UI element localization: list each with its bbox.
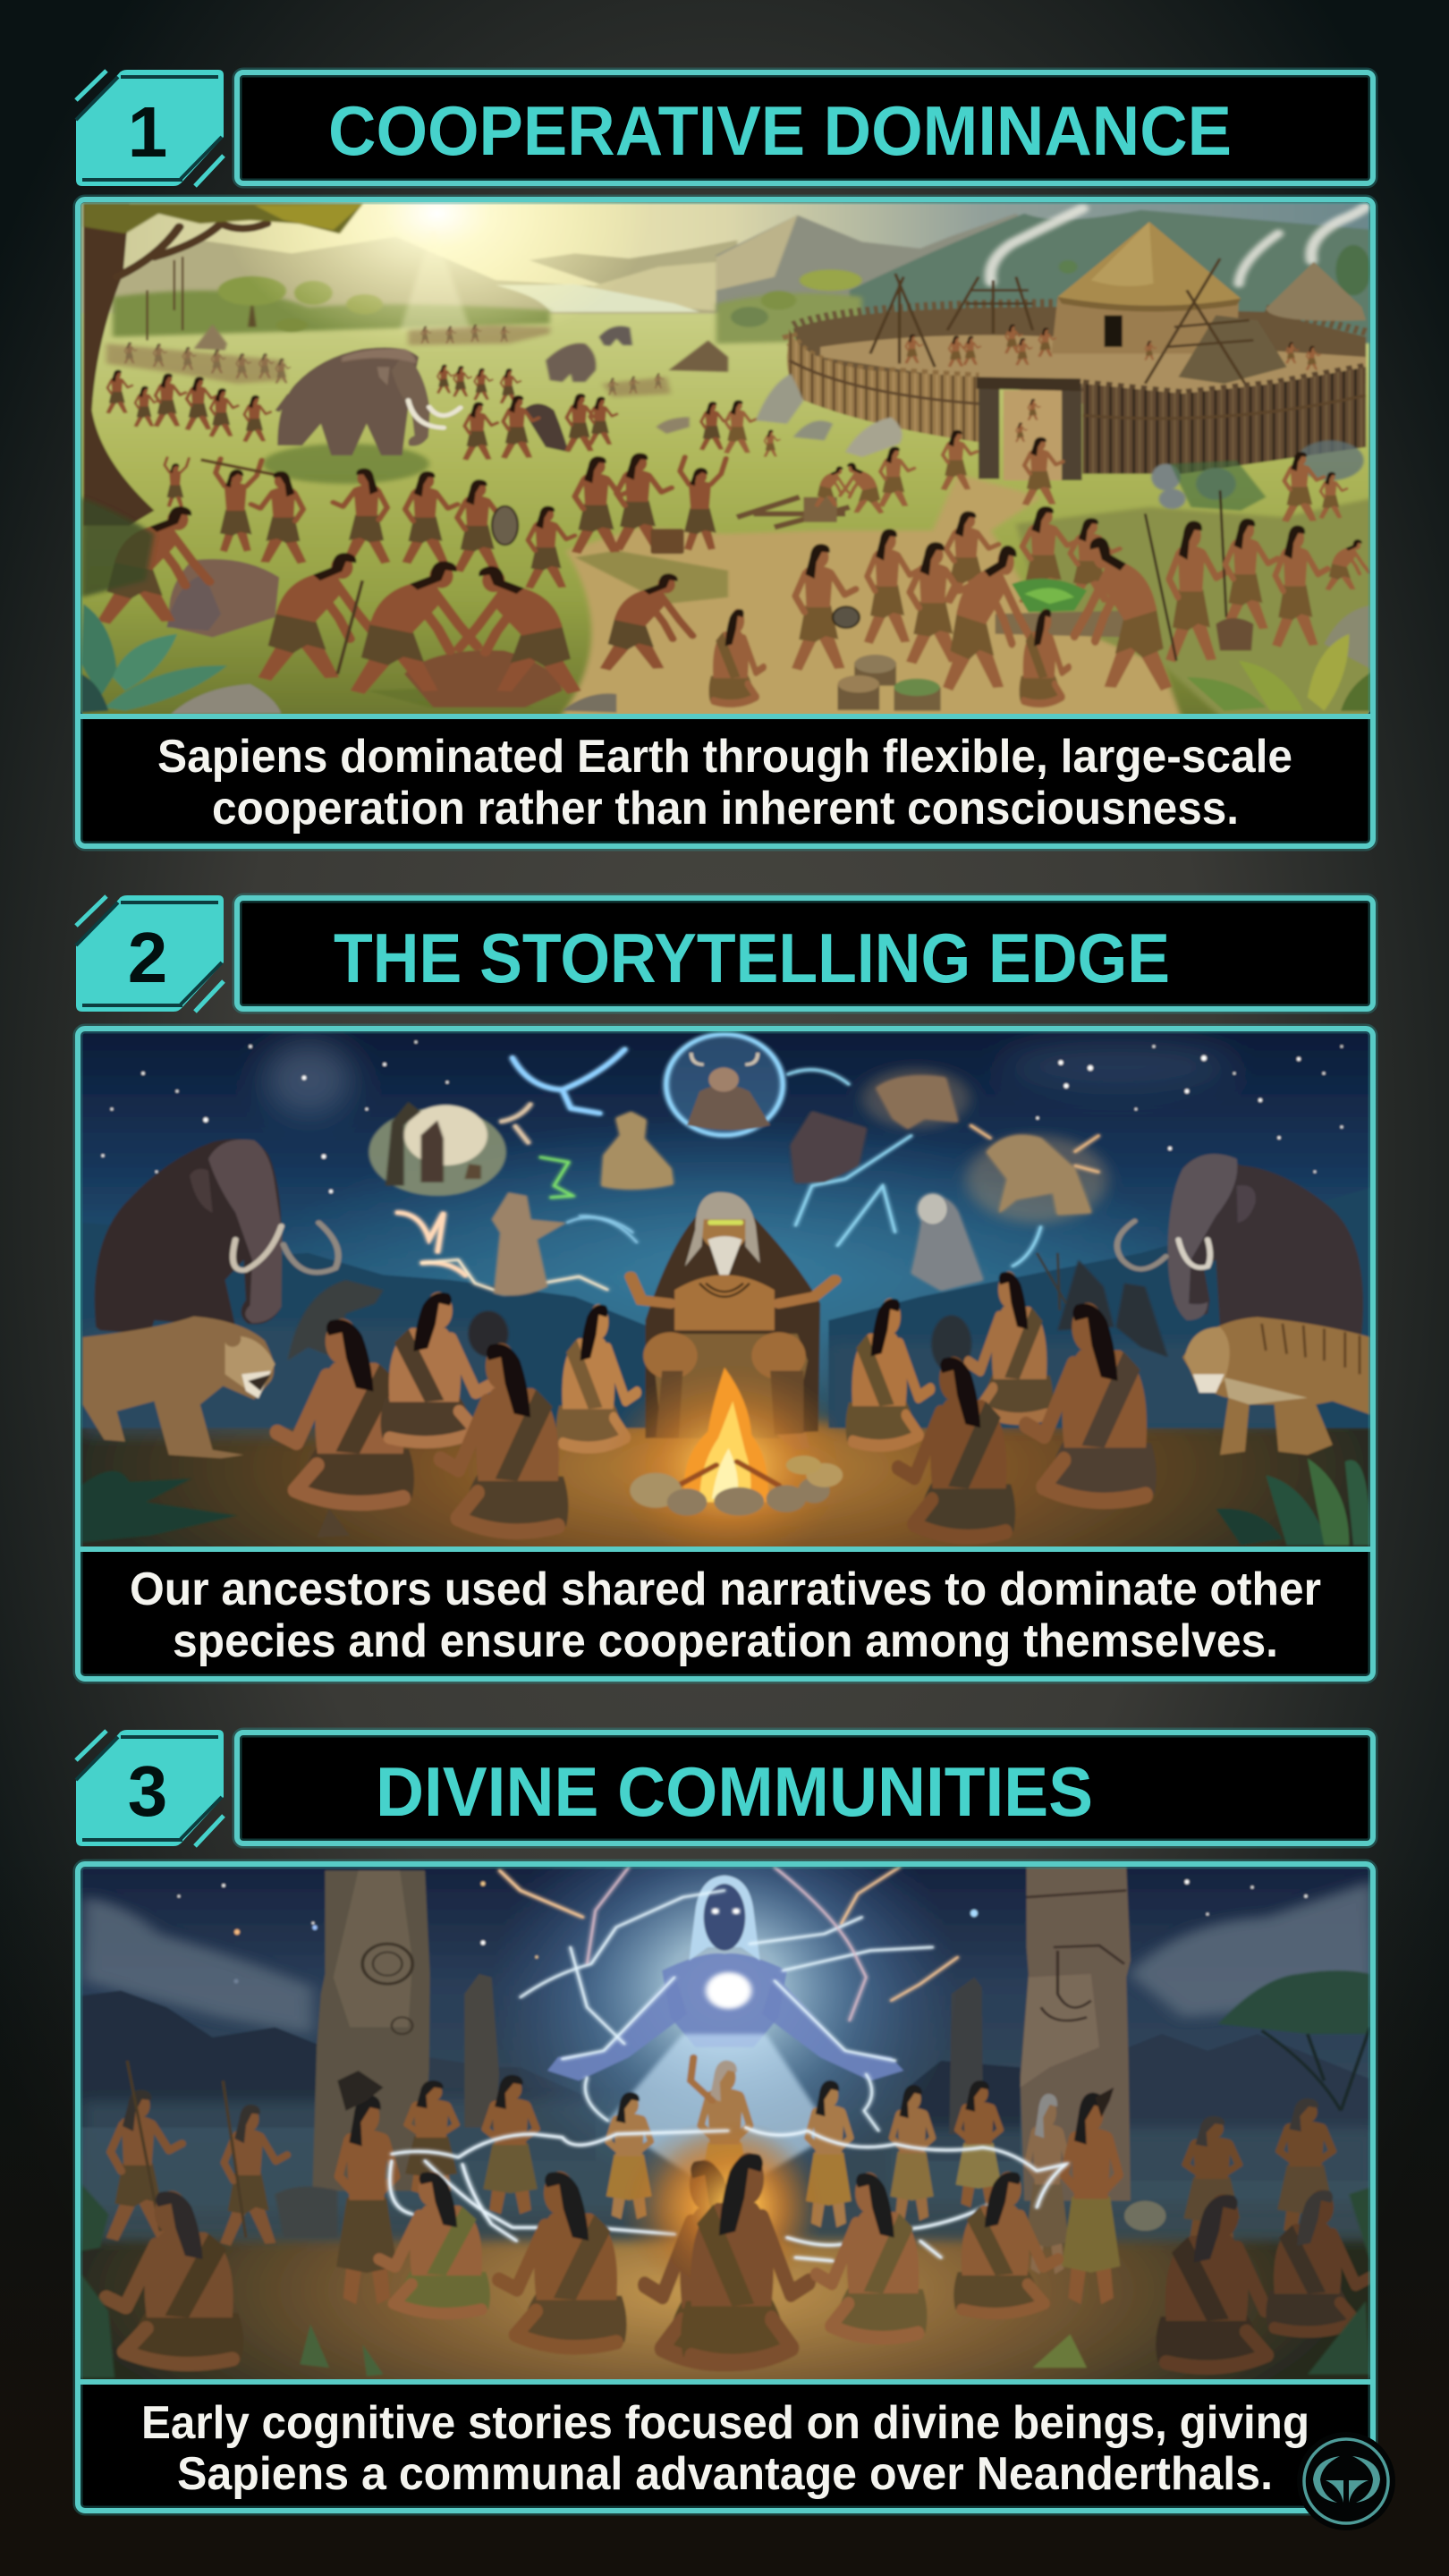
caption 3 (78, 2384, 1373, 2511)
table group (943, 512, 998, 604)
seated foreground (106, 2190, 243, 2364)
mammoth left (95, 1139, 338, 1334)
rocks (756, 374, 1364, 511)
heading: divine communities (237, 1733, 1373, 1843)
campfire (604, 1364, 853, 1566)
heading: the storytelling edge (237, 898, 1373, 1009)
smoke (990, 207, 1366, 284)
caption 3: Early cognitive stories focused on divine beings, giving (141, 2397, 1309, 2449)
logo badge (1297, 2432, 1395, 2530)
caption 3: Sapiens a communal advantage over Neanderthals. (177, 2448, 1273, 2500)
section header 3 (76, 1730, 1373, 1846)
caption 1: Sapiens dominated Earth through flexible, large-scale (157, 731, 1292, 783)
number badge 1 (76, 70, 224, 186)
foliage (81, 2184, 114, 2377)
number badge 2: 2 (128, 918, 167, 997)
heading: the storytelling edge: THE STORYTELLING EDGE (334, 919, 1170, 997)
panel frame 3 (78, 1864, 1373, 2511)
caption 2: species and ensure cooperation among themselves. (173, 1615, 1278, 1667)
gate people (878, 446, 914, 507)
hills (81, 1223, 741, 1428)
seated foreground (681, 2153, 809, 2362)
panel: the storytelling edge (63, 895, 1388, 1679)
far crowds (106, 326, 671, 397)
small mammoths (546, 326, 690, 434)
tree (81, 203, 362, 597)
long shadows (367, 550, 728, 708)
tiger right (1182, 1317, 1370, 1455)
energy (745, 2127, 1066, 2261)
number badge 3 (76, 1730, 224, 1846)
animal carcasses (169, 559, 279, 637)
number badge 2 (76, 895, 224, 1012)
caption 2: Our ancestors used shared narratives to dominate other (130, 1563, 1321, 1615)
orb (666, 1034, 783, 1135)
illustration: shaman storytelling by the fire (63, 1031, 1388, 1566)
shaman (631, 1192, 835, 1450)
ghost figures (966, 1135, 1107, 1223)
foreground people (97, 506, 209, 624)
woodpile (737, 497, 850, 527)
standing circle right (806, 2080, 852, 2227)
plant right (1216, 1509, 1283, 1546)
caption 2 (78, 1550, 1373, 1679)
foreground foliage (81, 604, 616, 714)
dim figures (931, 1259, 1168, 1372)
section header 2 (76, 895, 1373, 1012)
caption 1: cooperation rather than inherent consciousness. (212, 783, 1239, 835)
mammoth (263, 444, 429, 484)
divine being (491, 1780, 958, 2198)
panel: cooperative dominance (76, 70, 1377, 846)
stars (102, 1039, 1343, 1193)
caption 1 (78, 717, 1373, 846)
plant & stones (81, 1470, 238, 1543)
hunter group around beast (523, 403, 569, 452)
tiger left (82, 1317, 274, 1458)
poles (870, 258, 1253, 384)
seated listeners (277, 1318, 414, 1503)
dark figures (469, 1311, 508, 1357)
huts (1266, 262, 1366, 321)
barrels (838, 655, 941, 711)
illustration: ritual circle beneath a divine being (63, 1780, 1388, 2393)
midground people (165, 458, 189, 507)
hills right (828, 1186, 1377, 1428)
heading: cooperative dominance (237, 72, 1373, 183)
energy streams (390, 2131, 728, 2241)
mammoth right (1168, 1157, 1363, 1337)
gate (1004, 390, 1062, 480)
panel frame 2 (78, 1029, 1373, 1679)
seated listeners (845, 1298, 930, 1445)
panel frame 1 (78, 199, 1373, 846)
number badge 3: 3 (128, 1751, 167, 1831)
panel: divine communities (63, 1730, 1388, 2511)
section header 1 (76, 70, 1373, 186)
front fence (789, 334, 979, 378)
heading: divine communities: DIVINE COMMUNITIES (376, 1752, 1093, 1831)
back fence and compound (793, 307, 1366, 384)
vignette visions (369, 1102, 506, 1196)
illustration: hunters, mammoths and palisade village (80, 202, 1370, 714)
compound people (724, 325, 1320, 457)
number badge 1: 1 (128, 92, 167, 172)
heading: cooperative dominance: COOPERATIVE DOMINANCE (328, 91, 1232, 170)
standing circle left (106, 2089, 182, 2241)
plant (1324, 606, 1374, 671)
